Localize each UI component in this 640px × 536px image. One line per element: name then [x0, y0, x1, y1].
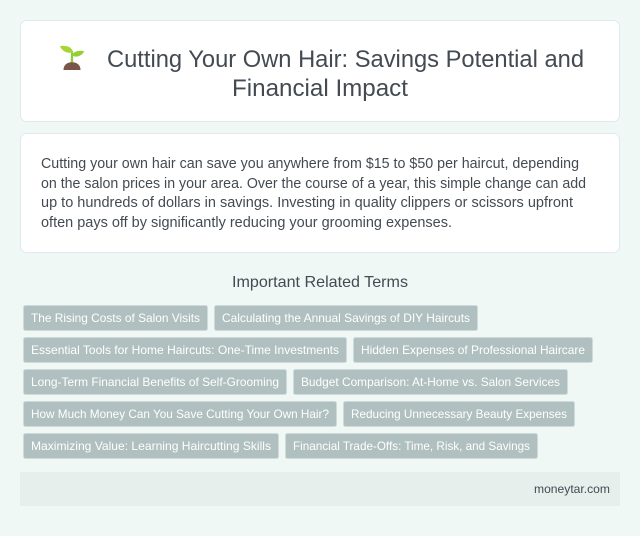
tag 7 — [24, 402, 336, 426]
tag 4: Hidden Expenses of Professional Haircare — [361, 343, 585, 357]
tag 2 — [214, 306, 478, 330]
heading: related terms: Important Related Terms — [232, 274, 408, 291]
tag 6: Budget Comparison: At-Home vs. Salon Services — [301, 375, 560, 389]
tag 9: Maximizing Value: Learning Haircutting Skills — [31, 439, 271, 453]
tag 5: Long-Term Financial Benefits of Self-Grooming — [31, 375, 279, 389]
tag 6 — [294, 370, 568, 394]
title text: Financial Impact — [232, 75, 408, 102]
tag 10 — [286, 434, 538, 458]
tag 2: Calculating the Annual Savings of DIY Haircuts — [222, 311, 470, 325]
summary paragraph: often pays off by significantly reducing your grooming expenses. — [41, 214, 452, 231]
summary paragraph: on the salon prices in your area. Over the course of a year, this simple change can add — [41, 175, 586, 192]
tag 7: How Much Money Can You Save Cutting Your Own Hair? — [31, 407, 329, 421]
summary paragraph — [41, 155, 586, 231]
summary paragraph: up to hundreds of dollars in savings. Investing in quality clippers or scissors upfront — [41, 194, 574, 211]
tag list — [24, 306, 592, 458]
tag 4 — [354, 338, 592, 362]
panel: title card — [20, 20, 620, 122]
tag 3 — [24, 338, 346, 362]
title text: Cutting Your Own Hair: Savings Potential and — [107, 46, 584, 73]
footer bar — [20, 472, 620, 506]
summary paragraph: Cutting your own hair can save you anywhere from $15 to $50 per haircut, depending — [41, 155, 579, 172]
tag 8: Reducing Unnecessary Beauty Expenses — [351, 407, 567, 421]
tag 1 — [24, 306, 208, 330]
tag 9 — [24, 434, 278, 458]
tag 5 — [24, 370, 286, 394]
footer source text: moneytar.com — [534, 482, 610, 496]
tag 10: Financial Trade-Offs: Time, Risk, and Savings — [293, 439, 530, 453]
icon: seedling — [60, 46, 84, 70]
tag 1: The Rising Costs of Salon Visits — [31, 311, 200, 325]
tag 8 — [344, 402, 574, 426]
title text — [107, 46, 584, 102]
tag 3: Essential Tools for Home Haircuts: One-Time Investments — [31, 343, 339, 357]
panel: summary text — [20, 134, 620, 252]
